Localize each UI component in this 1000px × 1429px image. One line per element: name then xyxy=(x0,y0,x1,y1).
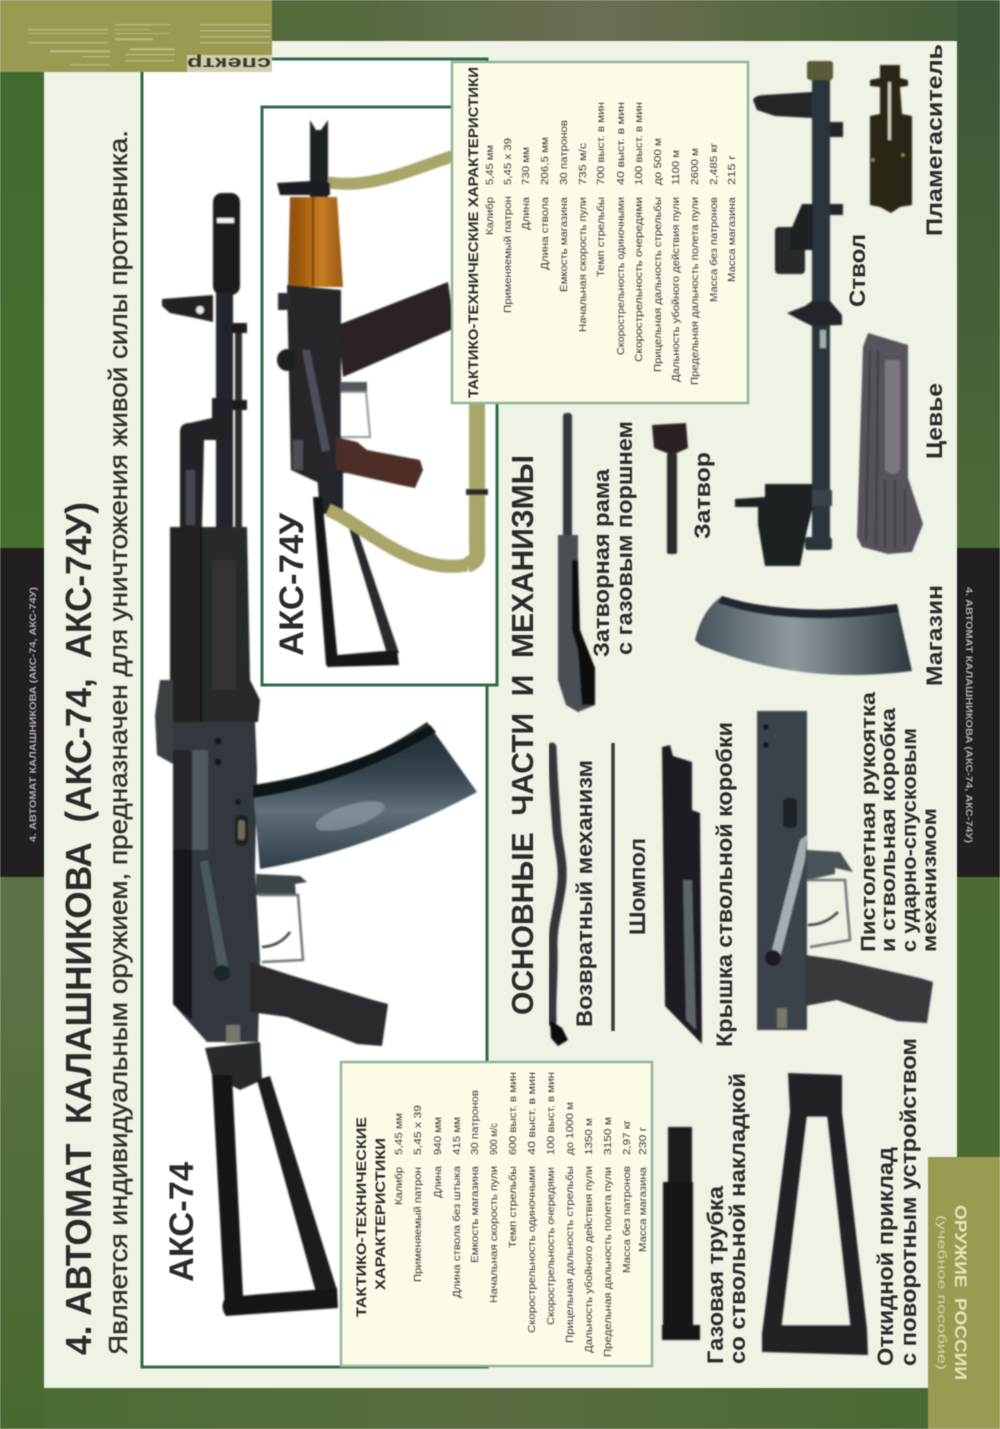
spec rows: Дальность убойного действия пули xyxy=(670,197,682,382)
spec rows: Длина ствола без штыка xyxy=(451,1166,463,1298)
spec heading xyxy=(353,1117,388,1317)
part: gas tube with handguard xyxy=(662,1127,700,1340)
spec rows: Начальная скорость пули xyxy=(577,197,589,332)
series block bottom right: (учебное пособие) xyxy=(935,1215,949,1370)
publisher block top left xyxy=(0,0,272,73)
spec rows: Прицельная дальность стрельбы xyxy=(564,1166,576,1343)
label: bolt: Затвор xyxy=(690,452,715,539)
spec rows: Применяемый патрон xyxy=(502,196,514,313)
label: pistol grip and receiver: и ствольная коробка xyxy=(878,707,900,952)
spec rows: 900 м/с xyxy=(488,1123,500,1155)
part: handguard xyxy=(857,333,923,554)
label: pistol grip and receiver: с ударно-спусковым xyxy=(899,728,921,952)
part: cleaning rod xyxy=(611,743,615,1031)
spec rows: 40 выст. в мин xyxy=(615,102,627,185)
spec rows: 1350 м xyxy=(583,1118,595,1155)
spec rows: 206,5 мм xyxy=(539,137,551,185)
label: folding stock xyxy=(873,1038,921,1366)
spec rows: 5,45 х 39 xyxy=(502,138,514,185)
spec rows: Длина xyxy=(520,197,532,230)
spec rows: Предельная дальность полета пули xyxy=(602,1167,614,1357)
part: flash suppressor xyxy=(870,65,912,213)
spec rows: Прицельная дальность стрельбы xyxy=(652,197,664,372)
side strip: left black label: 4. АВТОМАТ КАЛАШНИКОВА (АКС-74, АКС-74У) xyxy=(28,587,38,842)
spec rows: Применяемый патрон xyxy=(412,1167,424,1282)
label: bolt carrier: с газовым поршнем xyxy=(612,421,637,655)
spec rows: 230 г xyxy=(637,1127,649,1155)
label: gas tube: со ствольной накладкой xyxy=(725,1073,750,1364)
spec rows: 700 выст. в мин xyxy=(595,102,607,185)
side strip: right black label xyxy=(957,548,1000,877)
label: barrel: Ствол xyxy=(845,234,870,307)
spec rows: 5,45 мм xyxy=(484,145,496,185)
publisher logo xyxy=(187,54,272,73)
rifle: AKS-74 xyxy=(155,193,477,1316)
label: gas tube xyxy=(703,1073,750,1364)
spec rows: 730 мм xyxy=(520,147,532,185)
spec rows: Дальность убойного действия пули xyxy=(583,1166,595,1353)
spec table: AKS-74U xyxy=(452,62,748,403)
spec rows: 30 патронов xyxy=(558,120,570,185)
label: folding stock: с поворотным устройством xyxy=(896,1038,921,1366)
spec rows: Скорострельность одиночными xyxy=(615,197,627,355)
label: bolt carrier xyxy=(589,421,637,657)
part: bolt xyxy=(652,423,688,554)
label: flash suppressor: Пламегаситель xyxy=(922,44,947,236)
spec rows: до 500 м xyxy=(652,138,664,185)
label: handguard: Цевье xyxy=(922,383,947,459)
label: pistol grip and receiver: Пистолетная рукоятка xyxy=(858,691,880,952)
spec rows: 100 выст. в мин xyxy=(545,1072,557,1155)
spec rows: Скорострельность очередями xyxy=(633,197,645,362)
spec rows: 940 мм xyxy=(432,1117,444,1155)
spec rows: до 1000 м xyxy=(564,1102,576,1155)
spec rows: 2600 м xyxy=(689,148,701,185)
panel: AKS-74U frame xyxy=(262,107,497,685)
rifle: AKS-74U xyxy=(277,120,488,667)
spec rows: 5,45 х 39 xyxy=(412,1105,424,1155)
spec rows: Темп стрельбы xyxy=(595,197,607,277)
spec table: AKS-74 xyxy=(341,1062,652,1366)
label: AKS-74U: АКС-74У xyxy=(273,512,311,656)
spec rows: Масса магазина xyxy=(637,1167,649,1252)
spec heading: ХАРАКТЕРИСТИКИ xyxy=(372,1138,388,1290)
label: return spring: Возвратный механизм xyxy=(572,760,597,1027)
spec rows: Предельная дальность полета пули xyxy=(689,197,701,385)
part: folding stock xyxy=(762,1073,868,1355)
subtitle: Является индивидуальным оружием, предназначен для уничтожения живой силы противника. xyxy=(103,130,133,1355)
spec rows: 2,97 кг xyxy=(621,1120,633,1155)
spec heading: ТАКТИКО-ТЕХНИЧЕСКИЕ ХАРАКТЕРИСТИКИ xyxy=(465,67,481,398)
label: gas tube: Газовая трубка xyxy=(703,1185,728,1364)
spec rows: Калибр xyxy=(393,1167,405,1205)
part: magazine xyxy=(695,596,912,675)
spec rows: 40 выст. в мин xyxy=(526,1072,538,1155)
label: AKS-74: АКС-74 xyxy=(163,1162,201,1282)
spec rows xyxy=(484,102,738,385)
spec rows: 415 мм xyxy=(451,1117,463,1155)
heading: main parts: ОСНОВНЫЕ ЧАСТИ И МЕХАНИЗМЫ xyxy=(505,455,540,1015)
label: folding stock: Откидной приклад xyxy=(873,1147,898,1366)
spec rows: 735 м/с xyxy=(577,143,589,185)
spec rows: Масса без патронов xyxy=(621,1166,633,1273)
spec rows: Начальная скорость пули xyxy=(488,1166,500,1303)
series block bottom right: ОРУЖИЕ РОССИИ xyxy=(951,1205,970,1380)
spec rows: 1100 м xyxy=(670,150,682,185)
spec rows: Скорострельность очередями xyxy=(545,1167,557,1325)
spec rows: Емкость магазина xyxy=(469,1166,481,1263)
spec rows: 2,485 кг xyxy=(708,143,720,185)
spec rows: Темп стрельбы xyxy=(507,1166,519,1248)
side strip: right black label: 4. АВТОМАТ КАЛАШНИКОВА (АКС-74, АКС-74У) xyxy=(964,587,974,843)
label: bolt carrier: Затворная рама xyxy=(589,468,614,657)
label: pistol grip and receiver: механизмом xyxy=(920,808,941,952)
spec heading: ТАКТИКО-ТЕХНИЧЕСКИЕ xyxy=(353,1117,369,1317)
part: bolt carrier with gas piston xyxy=(558,413,595,712)
spec rows: Емкость магазина xyxy=(558,197,570,292)
spec rows: Скорострельность одиночными xyxy=(526,1166,538,1333)
title: 4. АВТОМАТ КАЛАШНИКОВА (АКС-74, АКС-74У) xyxy=(58,502,99,1355)
spec rows: 5,45 мм xyxy=(393,1113,405,1155)
spec rows: Длина ствола xyxy=(539,197,551,270)
spec rows: 215 г xyxy=(726,155,738,185)
part: receiver cover xyxy=(662,745,702,1044)
label: receiver cover: Крышка ствольной коробки xyxy=(712,722,737,1047)
part: return spring xyxy=(550,747,568,1046)
spec rows: Масса без патронов xyxy=(708,197,720,302)
panel: main frame AKS-74 xyxy=(142,59,487,1367)
label: cleaning rod: Шомпол xyxy=(625,838,650,935)
label: pistol grip and receiver xyxy=(858,691,941,952)
spec rows: 30 патронов xyxy=(469,1090,481,1155)
spec rows: Длина xyxy=(432,1166,444,1198)
spec rows: 3150 м xyxy=(602,1117,614,1155)
publisher logo: спектр xyxy=(187,54,271,73)
label: magazine: Магазин xyxy=(922,585,947,686)
part: barrel xyxy=(735,61,843,566)
spec rows: Масса магазина xyxy=(726,197,738,282)
spec rows: 100 выст. в мин xyxy=(633,102,645,185)
spec rows: 600 выст. в мин xyxy=(507,1072,519,1155)
series block bottom right xyxy=(928,1157,1000,1429)
spec rows xyxy=(393,1072,649,1357)
spec rows: Калибр xyxy=(484,197,496,235)
sling xyxy=(326,156,477,565)
side strip: left black label xyxy=(0,548,44,877)
part: pistol grip and receiver xyxy=(757,711,933,1030)
